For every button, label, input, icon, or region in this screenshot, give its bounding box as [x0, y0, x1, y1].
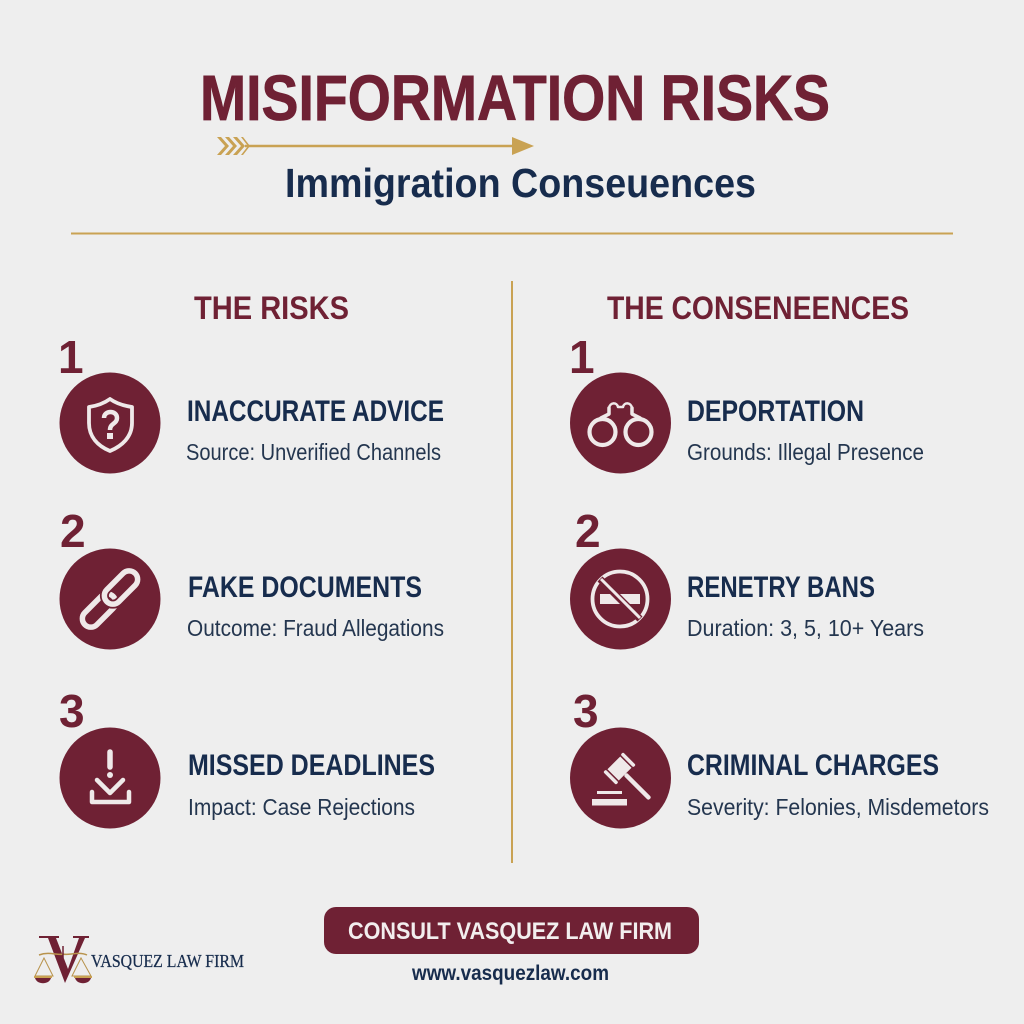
consequence 2: reentry bans: Duration: 3, 5, 10+ Years [687, 615, 924, 641]
consequence 2: reentry bans: RENETRY BANS [687, 571, 875, 604]
consequence 3: criminal charges: CRIMINAL CHARGES [687, 749, 939, 782]
risk 2: fake documents: FAKE DOCUMENTS [188, 571, 422, 604]
consequence 1: deportation: Grounds: Illegal Presence [687, 439, 924, 465]
risk 2: fake documents: Outcome: Fraud Allegations [187, 615, 444, 641]
risk 2: fake documents: 2 [60, 505, 86, 557]
icon: prohibited sign [570, 548, 671, 650]
risk 3: missed deadlines: 3 [59, 685, 85, 737]
consequence 3: criminal charges: Severity: Felonies, Misdemetors [687, 794, 989, 820]
call to action button [324, 907, 699, 954]
risk 1: inaccurate advice: INACCURATE ADVICE [187, 395, 444, 428]
call to action button: CONSULT VASQUEZ LAW FIRM [348, 918, 672, 945]
logo: vasquez law firm: VASQUEZ LAW FIRM [91, 951, 244, 971]
icon: gavel [570, 728, 671, 828]
consequence 1: deportation: DEPORTATION [687, 395, 864, 428]
heading: the consequences: THE CONSENEENCES [607, 290, 909, 326]
icon: alert download tray [60, 728, 160, 828]
icon: chain link [60, 548, 160, 650]
risk 3: missed deadlines: Impact: Case Rejections [188, 794, 415, 820]
consequence 3: criminal charges: 3 [573, 685, 599, 737]
heading: the risks: THE RISKS [194, 290, 349, 326]
risk 3: missed deadlines: MISSED DEADLINES [188, 749, 435, 782]
icon: shield with question mark [60, 372, 160, 474]
arrow [217, 137, 534, 155]
consequence 1: deportation [569, 331, 924, 474]
risk 3: missed deadlines [59, 685, 435, 828]
website: www.vasquezlaw.com [411, 962, 609, 985]
consequence 1: deportation: 1 [569, 331, 595, 383]
consequence 2: reentry bans: 2 [575, 505, 601, 557]
panel: the consequences [569, 290, 989, 828]
risk 1: inaccurate advice: 1 [58, 331, 84, 383]
subtitle: Immigration Conseuences [285, 160, 756, 206]
consequence 3: criminal charges [570, 685, 989, 828]
icon: handcuffs [570, 372, 671, 474]
panel: the risks [58, 290, 444, 828]
risk 1: inaccurate advice: Source: Unverified Channels [186, 439, 441, 465]
risk 2: fake documents [60, 505, 444, 650]
title: MISIFORMATION RISKS [200, 62, 830, 134]
risk 1: inaccurate advice [58, 331, 444, 474]
consequence 2: reentry bans [570, 505, 924, 650]
logo: vasquez law firm [34, 936, 244, 983]
